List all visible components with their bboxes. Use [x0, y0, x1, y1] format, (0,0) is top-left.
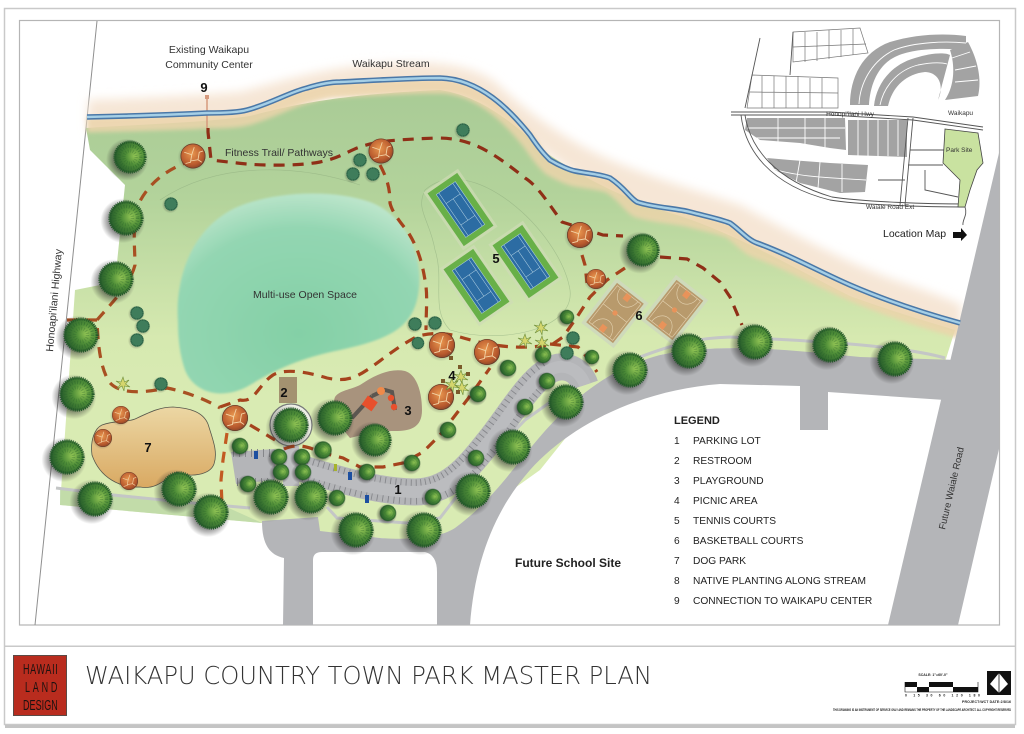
legend items: NATIVE PLANTING ALONG STREAM — [693, 576, 866, 587]
legend heading: LEGEND — [674, 415, 720, 427]
legend items: 4 — [674, 496, 680, 507]
road network — [262, 348, 958, 625]
location map — [731, 28, 983, 241]
light walking paths — [56, 337, 945, 523]
location map labels: Park Site — [946, 147, 973, 154]
location map roads — [731, 32, 983, 225]
sheet shadow — [5, 725, 1015, 728]
north arrow — [987, 671, 1011, 695]
plan key numbers: 1 — [394, 482, 402, 497]
tennis courts — [428, 173, 558, 322]
logo: HAWAII — [23, 661, 58, 678]
map labels: Future School Site — [515, 556, 621, 570]
legend — [674, 415, 872, 607]
legend items: DOG PARK — [693, 556, 746, 567]
location map park site — [943, 129, 983, 207]
legend items: PICNIC AREA — [693, 496, 758, 507]
bank blend over lawn edge — [87, 86, 960, 331]
restroom plaza circle — [270, 404, 312, 446]
walkway to parking — [283, 446, 299, 486]
title: WAIKAPU COUNTRY TOWN PARK MASTER PLAN — [85, 661, 652, 690]
map border — [20, 20, 1000, 625]
map labels: Fitness Trail/ Pathways — [225, 147, 333, 159]
logo: LAND — [25, 679, 57, 696]
legend items: RESTROOM — [693, 456, 752, 467]
legend items: BASKETBALL COURTS — [693, 536, 804, 547]
legend items: 6 — [674, 536, 680, 547]
location map caption: Location Map — [883, 228, 946, 240]
legend items: CONNECTION TO WAIKAPU CENTER — [693, 596, 872, 607]
restroom — [279, 377, 297, 403]
plan key numbers — [144, 80, 643, 497]
residential blocks — [745, 34, 980, 193]
scale bar: SCALE: 1"=60'-0" — [918, 673, 948, 677]
fitness trail — [65, 128, 742, 505]
logo: DESIGN — [23, 697, 58, 714]
scale bar — [905, 673, 980, 698]
Future Waiale Road — [888, 153, 999, 625]
connector marker — [205, 95, 209, 99]
location map labels — [826, 110, 973, 211]
panel: site plan — [20, 20, 1000, 625]
legend items: 5 — [674, 516, 680, 527]
map labels: Community Center — [165, 59, 253, 71]
location map labels: Waikapu — [948, 110, 973, 117]
icon: location arrow — [953, 228, 967, 241]
map labels: Existing Waikapu — [169, 44, 249, 56]
plan key numbers: 9 — [200, 80, 208, 95]
legend items: 1 — [674, 436, 680, 447]
map labels: Waikapu Stream — [352, 58, 430, 70]
title block — [5, 646, 1015, 716]
title block divider — [5, 646, 1015, 647]
project info: PROJECT:WCT DATE:2/8/16 — [962, 700, 1011, 704]
playground equipment — [352, 387, 397, 418]
park lawn — [60, 90, 955, 540]
basketball courts — [585, 278, 705, 345]
connector to community center — [206, 97, 208, 128]
dog park surface — [92, 407, 215, 488]
legend items: PARKING LOT — [693, 436, 761, 447]
large trees — [42, 138, 914, 555]
faint contour lines — [160, 170, 570, 336]
map labels: Honoapi'ilani Highway — [44, 248, 65, 352]
plan key numbers: 5 — [492, 251, 500, 266]
site boundary line — [35, 21, 97, 625]
shrubs — [128, 122, 600, 525]
plan key numbers: 4 — [448, 368, 456, 383]
block streets — [747, 42, 978, 192]
legend items: 7 — [674, 556, 680, 567]
lower lawn strip — [60, 488, 262, 523]
playground surface — [334, 370, 422, 438]
legend items: 8 — [674, 576, 680, 587]
plan key numbers: 3 — [404, 403, 412, 418]
plan key numbers: 6 — [635, 308, 643, 323]
legend items: 2 — [674, 456, 680, 467]
location map labels: Honopi'ilani Hwy — [826, 111, 875, 118]
parking lot — [231, 367, 585, 503]
open space lawn — [178, 193, 419, 393]
map labels: Future Waiale Road — [937, 446, 967, 531]
logo — [14, 656, 66, 716]
legend items: 9 — [674, 596, 680, 607]
palms — [116, 321, 549, 395]
picnic tables — [441, 356, 470, 394]
scale bar: 0 15 30 60 120 180 — [905, 694, 980, 698]
plan key numbers: 2 — [280, 385, 288, 400]
lava-colored feature trees — [92, 138, 607, 492]
sand bank along stream — [88, 63, 962, 332]
estate lots — [747, 28, 868, 108]
map labels: Multi-use Open Space — [253, 289, 357, 301]
location map labels: Waiale Road Ext — [866, 204, 914, 211]
legend items — [674, 436, 872, 607]
map labels — [44, 44, 967, 570]
legend items: PLAYGROUND — [693, 476, 764, 487]
Waikapu Stream — [87, 78, 960, 323]
plan key numbers: 7 — [144, 440, 152, 455]
legend items: TENNIS COURTS — [693, 516, 776, 527]
legend items: 3 — [674, 476, 680, 487]
